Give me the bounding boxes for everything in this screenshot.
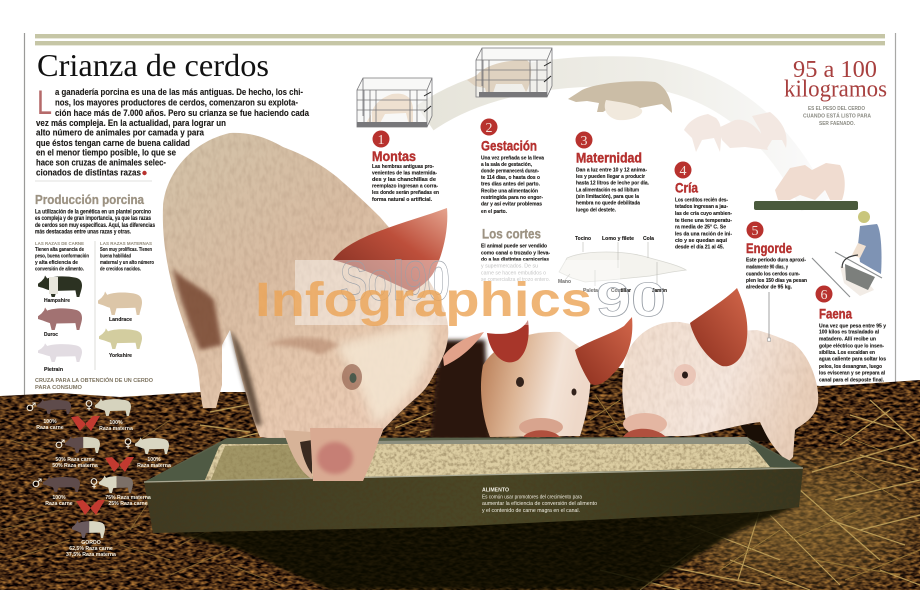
step 4: cría: cio y se quedan aquí xyxy=(675,238,727,244)
cross diagram xyxy=(26,398,171,558)
column: razas maternas: buena habilidad xyxy=(100,254,131,260)
result: gordo: GORDO xyxy=(81,540,101,546)
step 3: maternidad: les y pueden llegar a producir xyxy=(576,174,646,180)
step 3: maternidad: hasta 12 litros de leche por día. xyxy=(576,181,649,187)
column: razas de carne: conversión de alimento. xyxy=(35,266,84,272)
text: alimento xyxy=(482,488,597,514)
step 4: cría: Cría xyxy=(675,180,698,196)
step 4: cría: tetados ingresan a jau- xyxy=(675,204,728,210)
text: alimento: y el contenido de carne magra en el canal. xyxy=(482,508,580,514)
step 3: maternidad: Maternidad xyxy=(576,150,642,166)
intro text block: en el menor tiempo posible, lo que se xyxy=(36,148,176,158)
column: razas maternas: de crecidos nacidos. xyxy=(100,266,141,272)
step 6: faena: canal para el desposte final. xyxy=(819,377,884,383)
column: razas de carne: LAS RAZAS DE CARNE xyxy=(35,241,85,247)
step 4: cría xyxy=(674,162,732,251)
panel: los cortes xyxy=(481,225,550,283)
right inner wall xyxy=(748,440,802,467)
cross row 2 xyxy=(52,436,171,472)
ear xyxy=(333,208,447,292)
photo: feeding trough xyxy=(144,428,803,533)
callout: peso final: kilogramos xyxy=(784,77,887,103)
step 1: montas: reemplazo ingresan a corra- xyxy=(372,184,438,190)
panel: los cortes: y supermercados. De su xyxy=(481,264,538,270)
number badge 6: 6 xyxy=(820,288,828,303)
column: razas de carne: peso, buena conformación xyxy=(35,254,89,260)
heading: producción porcina: Producción porcina xyxy=(35,192,145,207)
step 2: gestación: donde permanecerá duran- xyxy=(481,168,539,174)
intro text block: alto número de animales por camada y para xyxy=(36,128,205,138)
step 6: faena xyxy=(816,286,887,383)
column: razas de carne: y alta eficiencia de xyxy=(35,260,78,266)
number badge 2: 2 xyxy=(486,121,492,136)
intro text block: vez más compleja. En la actualidad, para lograr un xyxy=(36,118,226,129)
photo: left feeding pig xyxy=(163,133,484,480)
intro text block: cionados de distintas razas xyxy=(36,168,141,178)
panel: los cortes: carne se hacen embutidos o xyxy=(481,270,546,276)
column: razas maternas: LAS RAZAS MATERNAS xyxy=(100,241,153,247)
step 4: cría: les da una ración de ini- xyxy=(675,231,732,237)
panel: los cortes: se comercializa el trozo entero. xyxy=(481,277,550,283)
arrow pair xyxy=(71,416,100,431)
cross row 1: ♀ xyxy=(85,398,93,412)
diagram: cortes del cerdo: Paleta xyxy=(583,288,599,294)
watermark: Infographics xyxy=(255,274,592,327)
step 1: montas xyxy=(372,130,439,203)
cross row 1: 100% xyxy=(43,419,57,425)
diagram: cortes del cerdo: Mano xyxy=(558,279,572,285)
step 6: faena: sibiliza. Los escaldan en xyxy=(819,350,875,356)
breed: Duroc: Duroc xyxy=(44,332,58,338)
panel: producción porcina: más destacadas entre unas razas y otras. xyxy=(35,228,131,236)
column: razas de carne: Tienen alta ganancia de xyxy=(35,247,84,253)
cross row 3 xyxy=(32,475,151,515)
diagram: cortes del cerdo: Cola xyxy=(643,236,655,242)
step 4: cría: Los cerditos recién des- xyxy=(675,197,728,203)
step 3: maternidad: Dan a luz entre 10 y 12 anima- xyxy=(576,167,647,173)
panel: los cortes: como canal o trozado y lleva- xyxy=(481,250,550,256)
result: gordo xyxy=(66,520,116,558)
column: razas maternas: Son muy prolíficas. Tienen xyxy=(100,247,152,253)
step 6: faena: matadero. Allí recibe un xyxy=(819,337,877,343)
breed: Landrace xyxy=(98,291,142,323)
text: alimento: aumentar la eficiencia de conversión del alimento xyxy=(482,501,597,507)
photo: straw ground xyxy=(0,340,920,590)
step 1: montas: Montas xyxy=(372,148,416,164)
cross row 3: ♀ xyxy=(90,476,98,490)
step 2: gestación: restringida para no engor- xyxy=(481,195,543,201)
panel: los cortes: do a las distintas carnicerías xyxy=(481,257,549,263)
cross row 1: 100% xyxy=(109,420,123,426)
callout: peso final: 95 a 100 xyxy=(793,57,877,83)
icon: cage with sow (montas) xyxy=(357,78,432,127)
step 1: montas: des y las chanchillas de xyxy=(372,177,436,183)
step 6: faena: los evisceran y se prepara al xyxy=(819,371,885,377)
icon: worker at scalding tray xyxy=(812,211,882,297)
step 2: gestación: dar y así evitar problemas xyxy=(481,202,542,208)
icon: cage with sow (gestación) xyxy=(467,48,552,97)
cross row 1: Raza carne xyxy=(36,425,64,431)
step 5: engorde: Engorde xyxy=(746,240,792,256)
panel: producción porcina: La utilización de la genética en un plantel porcino xyxy=(35,208,151,216)
cross row 2: 50% Raza materna xyxy=(52,463,98,469)
step 2: gestación: en el parto. xyxy=(481,209,507,215)
intro text block: ción hace más de 7.000 años. Pero su crianza se fue haciendo cada xyxy=(55,108,310,119)
cross row 1: Raza materna xyxy=(99,426,133,432)
step 2: gestación: a la sala de gestación, xyxy=(481,162,532,168)
heading: cruza: CRUZA PARA LA OBTENCIÓN DE UN CERDO xyxy=(35,376,154,384)
column: razas maternas: maternal y un alto número xyxy=(100,260,154,266)
step 5: engorde: Este período dura aproxi- xyxy=(746,258,806,264)
step 2: gestación: Una vez preñada se la lleva xyxy=(481,155,545,161)
step 1: montas: Las hembras antiguas pro- xyxy=(372,164,434,170)
heading: cruza xyxy=(35,376,154,391)
breed: Yorkshire: Yorkshire xyxy=(109,353,132,359)
cross row 1: ♂ xyxy=(26,400,36,414)
cross row 3: ♂ xyxy=(32,476,42,490)
step 6: faena: golpe eléctrico que lo insen- xyxy=(819,343,884,349)
callout line: engorde xyxy=(768,292,771,341)
step 3: maternidad xyxy=(576,132,649,213)
step 1: montas: les donde serán preñadas en xyxy=(372,190,439,196)
cross row 2: Raza materna xyxy=(137,463,171,469)
callout: peso final xyxy=(784,57,887,127)
intro text block: hace son cruzas de animales selec- xyxy=(36,158,166,168)
watermark: Sol90 xyxy=(340,249,450,312)
cross row 2: ♂ xyxy=(55,437,65,451)
photo: right pig xyxy=(622,288,818,462)
breed: Duroc xyxy=(38,307,82,338)
step 4: cría: te tiene una temperatu- xyxy=(675,218,732,224)
eye xyxy=(342,364,362,390)
panel: producción porcina: de cerdos son muy específicas. Aquí, las diferencias xyxy=(35,222,155,229)
text: alimento: ALIMENTO xyxy=(482,488,510,494)
breed: Hampshire xyxy=(38,275,82,304)
feed xyxy=(182,444,785,481)
pig muzzle over the feed xyxy=(283,428,383,481)
step 2: gestación: Recibe una alimentación xyxy=(481,188,539,194)
step 6: faena: Faena xyxy=(819,306,852,322)
column: razas de carne xyxy=(35,241,89,272)
panel: producción porcina: es compleja y de gran importancia, ya que las razas xyxy=(35,215,151,222)
back wall and rim xyxy=(144,437,803,482)
step 5: engorde: madamente 90 días, y xyxy=(746,265,789,271)
breed: Hampshire: Hampshire xyxy=(44,298,70,304)
step 6: faena: 100 kilos es trasladado al xyxy=(819,330,879,336)
step 5: engorde: alrededor de 95 kg. xyxy=(746,285,792,291)
callout: peso final: ES EL PESO DEL CERDO xyxy=(808,106,865,112)
panel: producción porcina xyxy=(35,192,155,373)
icon: sow nursing piglets xyxy=(568,81,672,120)
cross row 2: ♀ xyxy=(124,436,132,450)
column: razas maternas xyxy=(100,241,154,272)
intro text block: que éstos tengan carne de buena calidad xyxy=(36,138,190,149)
diagram: cortes del cerdo: Lomo y filete xyxy=(602,236,634,242)
intro text block: nos, los mayores productores de cerdos, comenzaron su explota- xyxy=(55,98,298,108)
breed: Yorkshire xyxy=(99,328,142,359)
watermark xyxy=(255,249,666,327)
shadow beneath trough xyxy=(165,505,800,590)
step 5: engorde xyxy=(746,222,807,291)
breed: Landrace: Landrace xyxy=(109,317,132,323)
left inner wall xyxy=(146,444,220,481)
panel: los cortes: Los cortes xyxy=(482,225,541,241)
cross row 3: Raza carne xyxy=(45,501,73,507)
arrow pair xyxy=(105,457,134,472)
step 3: maternidad: luego del destete. xyxy=(576,207,616,213)
diagram: cortes del cerdo xyxy=(558,236,686,294)
icon: pigs eating at trough (engorde) xyxy=(754,163,858,210)
intro text block xyxy=(36,84,310,178)
step 2: gestación xyxy=(480,118,545,215)
cross row 3: 75% Raza materna xyxy=(105,495,151,501)
step 2: gestación: tres días antes del parto. xyxy=(481,182,540,188)
step 3: maternidad: (sin limitación), para que la xyxy=(576,194,640,200)
front face xyxy=(144,468,803,533)
diagram: cortes del cerdo: Tocino xyxy=(575,236,592,242)
step 4: cría: las de cría cuyo ambien- xyxy=(675,211,732,217)
callout: peso final: CUANDO ESTÁ LISTO PARA xyxy=(803,112,871,120)
arrow pair xyxy=(76,500,105,515)
number badge 5: 5 xyxy=(752,224,758,239)
step 5: engorde: plen los 150 días ya pesan xyxy=(746,278,807,284)
step 6: faena: pelos, los desangran, luego xyxy=(819,364,882,370)
step 6: faena: Una vez que pesa entre 95 y xyxy=(819,323,887,329)
photo: middle pig xyxy=(481,317,632,437)
step 1: montas: venientes de las maternida- xyxy=(372,170,437,176)
cross row 1 xyxy=(26,398,133,432)
diagram: cortes del cerdo: Jamón xyxy=(652,288,667,294)
icon: piglets (cría) xyxy=(684,112,787,152)
panel: los cortes: El animal puede ser vendido xyxy=(481,244,548,250)
step 2: gestación: te 114 días, o hasta dos o xyxy=(481,175,541,181)
step 4: cría: ra media de 25° C. Se xyxy=(675,225,726,231)
number badge 4: 4 xyxy=(680,164,686,179)
number badge 1: 1 xyxy=(378,133,384,148)
step 6: faena: agua caliente para soltar los xyxy=(819,357,886,363)
breed: Pietrain xyxy=(38,343,82,373)
step 3: maternidad: La alimentación es ad libitum xyxy=(576,188,639,194)
step 2: gestación: Gestación xyxy=(481,138,537,154)
step 5: engorde: cuando los cerdos cum- xyxy=(746,271,800,277)
title: Crianza de cerdos xyxy=(37,47,269,83)
arc of the production cycle xyxy=(425,71,815,205)
shaded rear leg xyxy=(173,268,222,350)
text: alimento: Es común usar promotores del crecimiento para xyxy=(482,494,582,500)
watermark: 90 xyxy=(596,274,666,327)
cross row 3: 25% Raza carne xyxy=(108,501,148,507)
cross row 2: 100% xyxy=(147,457,161,463)
intro text block: a ganadería porcina es una de las más antiguas. De hecho, los chi- xyxy=(55,87,303,98)
breed: Pietrain: Pietrain xyxy=(44,367,64,373)
far ear xyxy=(443,332,484,366)
step 3: maternidad: hembra no quede debilitada xyxy=(576,201,641,207)
cross row 3: 100% xyxy=(52,495,66,501)
callout: peso final: SER FAENADO. xyxy=(819,121,855,127)
number badge 3: 3 xyxy=(580,134,588,149)
step 1: montas: forma natural o artificial. xyxy=(372,197,432,203)
heading: cruza: PARA CONSUMO xyxy=(35,385,83,391)
result: gordo: 62,5% Raza carne xyxy=(69,546,113,552)
step 4: cría: desde el día 21 al 45. xyxy=(675,245,724,251)
result: gordo: 37,5% Raza materna xyxy=(66,552,116,558)
cross row 2: 50% Raza carne xyxy=(55,457,95,463)
diagram: cortes del cerdo: Costillar xyxy=(611,288,632,294)
drop cap: L xyxy=(37,84,52,122)
